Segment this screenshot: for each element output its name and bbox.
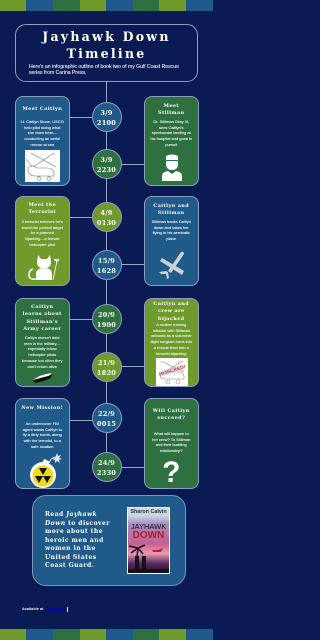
text: for a planned (31, 230, 54, 235)
text: and their budding (156, 442, 187, 447)
heading: Stillman (158, 110, 184, 116)
heading (158, 103, 184, 116)
heading: Terrorist (28, 209, 56, 215)
icon: hijacked helicopter (156, 358, 188, 386)
timeline spine (106, 81, 107, 467)
date: 24/9 2330 (92, 452, 122, 482)
text: Caitlyn doesn't date (25, 335, 60, 340)
heading: Caitlyn and (153, 301, 189, 307)
text: flying in his aerobatic (153, 230, 190, 235)
date: 3/9 2100: 3/9 (100, 108, 113, 116)
panel: Will Caitlyn succeed? (144, 398, 198, 489)
panel: Meet the Terrorist (15, 196, 70, 286)
text: found the perfect target (22, 225, 63, 230)
text: plane (166, 236, 176, 241)
text: helicopter pilot (29, 242, 55, 247)
date: 4/9 0130 (92, 202, 122, 232)
heading: Stillman (158, 210, 184, 216)
panel: Meet Stillman (144, 96, 198, 186)
available at line (22, 606, 68, 612)
heading: Stillman's (26, 319, 58, 325)
cover title: JAYHAWK (131, 522, 166, 531)
text: conducting an aerial (24, 136, 60, 141)
text: rescue at sea (30, 142, 54, 147)
call to action text: women in the (45, 545, 96, 552)
book cover (127, 507, 170, 574)
text: especially fellow (28, 346, 57, 351)
text (152, 219, 191, 241)
date: 4/9 0130: 4/9 (100, 208, 113, 216)
heading (22, 304, 62, 332)
connectors row 4 (70, 420, 144, 468)
icon: question mark: ? (162, 456, 180, 489)
heading: succeed? (157, 415, 185, 421)
title: Timeline (67, 46, 146, 60)
panel: Caitlyn and crew are hijacked (144, 298, 198, 387)
heading: New Mission! (21, 405, 63, 411)
text: because too often they (22, 358, 62, 363)
heading: learns about (23, 311, 62, 317)
call to action text: Read Jayhawk (45, 511, 97, 518)
date: 21/9 1820: 1820 (97, 368, 116, 376)
text: hijacking—a female (25, 236, 60, 241)
icon: helicopter (24, 150, 60, 182)
text: mission with Stillman (153, 328, 190, 333)
cover author: Sharon Calvin (130, 509, 167, 515)
text: sees Caitlyn's (159, 125, 184, 130)
text: agent wants Caitlyn to (23, 427, 62, 432)
heading: Meet (164, 103, 179, 109)
text: helicopter pilots (28, 352, 56, 357)
cover title second line: DOWN (133, 530, 164, 541)
date: 20/9 1900 (92, 304, 122, 334)
panel: New Mission (15, 398, 70, 489)
date: 22/9 0015: 22/9 (98, 410, 115, 418)
heading: hijacked (158, 316, 184, 322)
text: a rescue then into a (154, 345, 189, 350)
date: 15/9 1628 (92, 250, 122, 280)
text (22, 219, 63, 247)
date: 3/9 2230 (92, 149, 122, 179)
text: down and takes her (154, 225, 189, 230)
date: 22/9 0015: 0015 (97, 420, 116, 428)
date: 3/9 2230: 3/9 (100, 156, 113, 164)
top colour band (0, 0, 213, 11)
panel: Caitlyn learns about Stillman's Army career (15, 298, 70, 387)
text: relationship? (160, 448, 183, 453)
icon: doctor (162, 154, 182, 181)
text: Stillman tracks Caitlyn (152, 219, 191, 224)
text: she does best— (28, 130, 57, 135)
call to action text: Coast Guard. (45, 562, 94, 569)
text: spectacular landing at (152, 130, 191, 135)
bottom colour band (0, 629, 213, 640)
intro text: Here's an infographic outline of book two of my Gulf Coast Rescue series from Carina Press. (29, 64, 179, 76)
heading: Meet Caitlyn (22, 106, 62, 112)
heading (152, 408, 190, 421)
text (20, 119, 64, 147)
date: 24/9 2330: 2330 (97, 468, 116, 476)
heading: Meet the (28, 202, 56, 208)
text: with the terrorist, to a (24, 438, 61, 443)
panel: Meet Caitlyn (15, 96, 70, 186)
cover silhouettes (128, 544, 169, 572)
title panel (15, 24, 198, 82)
date: 21/9 1820: 21/9 (98, 358, 115, 366)
text: don't return alive (28, 364, 57, 369)
heading (153, 203, 189, 216)
text: safe location (31, 444, 53, 449)
text: A terrorist believes he's (22, 219, 63, 224)
panel: call to action (32, 495, 186, 586)
heading (28, 202, 56, 215)
text (22, 421, 62, 449)
text: helo pilot doing what (24, 125, 60, 130)
text: Dr. Stillman Gray III, (153, 119, 189, 124)
date: 21/9 1820 (92, 352, 122, 382)
date: 20/9 1900: 20/9 (98, 310, 115, 318)
icon: casket (33, 373, 52, 383)
date: 20/9 1900: 1900 (97, 320, 116, 328)
call to action text: heroic men and (45, 536, 104, 544)
text: fly a dirty bomb, along (23, 432, 62, 437)
hijacked stamp: HIJACKED! (159, 364, 186, 378)
icon: plane (159, 252, 184, 279)
heading (153, 301, 189, 322)
text: her crew? To Stillman (152, 437, 190, 442)
text: men in the military— (24, 341, 60, 346)
link highlight (47, 606, 66, 612)
icon: devil (28, 255, 59, 280)
available at line: Available at (22, 606, 43, 611)
call to action text (44, 511, 110, 569)
heading: crew are (158, 308, 185, 314)
text (150, 119, 192, 147)
date: 4/9 0130: 0130 (97, 218, 116, 226)
date: 15/9 1628: 15/9 (98, 256, 115, 264)
connectors (70, 117, 144, 165)
link end mark (66, 606, 68, 612)
date: 24/9 2330: 24/9 (98, 458, 115, 466)
title: Jayhawk Down (42, 28, 171, 44)
date: 22/9 0015 (92, 403, 122, 433)
heading: Caitlyn (31, 304, 53, 310)
call to action text: United States (45, 554, 97, 560)
text: An undercover FBI (26, 421, 59, 426)
date: 3/9 2100: 2100 (97, 118, 116, 126)
icon: radioactive bomb (30, 453, 62, 488)
text: flight surgeon turns into (150, 339, 192, 344)
title (41, 28, 171, 60)
text: terrorist hijacking (156, 351, 186, 356)
heading: Will Caitlyn (153, 408, 190, 414)
text (152, 431, 190, 453)
date: 3/9 2230: 2230 (97, 166, 116, 174)
text: What will happen to (154, 431, 189, 436)
connectors row 3 (70, 319, 144, 367)
call to action text: Down to discover (45, 520, 110, 526)
connectors row 2 (70, 217, 144, 265)
text (22, 335, 62, 369)
text: pursuit (165, 142, 177, 147)
call to action text: more about the (45, 528, 103, 535)
text: his hospital and goes in (150, 136, 192, 141)
text (150, 322, 192, 356)
panel: Caitlyn and Stillman (144, 196, 198, 286)
text: onboard as a volunteer (151, 333, 192, 338)
text: Lt. Caitlyn Stone, USCG (21, 119, 64, 124)
date: 15/9 1628: 1628 (97, 266, 116, 274)
heading: Caitlyn and (153, 203, 189, 209)
heading: Army career (23, 326, 61, 332)
text: A routine training (156, 322, 186, 327)
date: 3/9 2100 (92, 102, 122, 132)
